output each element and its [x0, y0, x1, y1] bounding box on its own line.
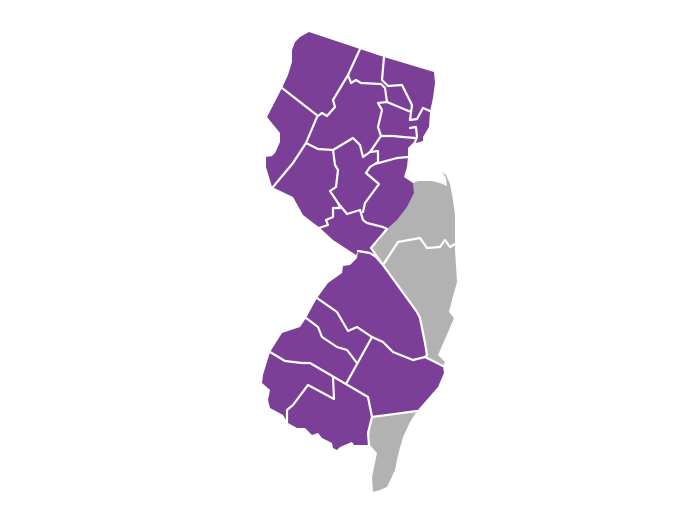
county borders: south	[270, 251, 443, 445]
purple region: southern counties	[262, 251, 444, 450]
gray region: southern cape county	[368, 411, 417, 492]
county borders: north	[273, 49, 455, 265]
purple region: northern counties	[266, 32, 435, 256]
gray region: northeast shore counties	[371, 172, 457, 366]
